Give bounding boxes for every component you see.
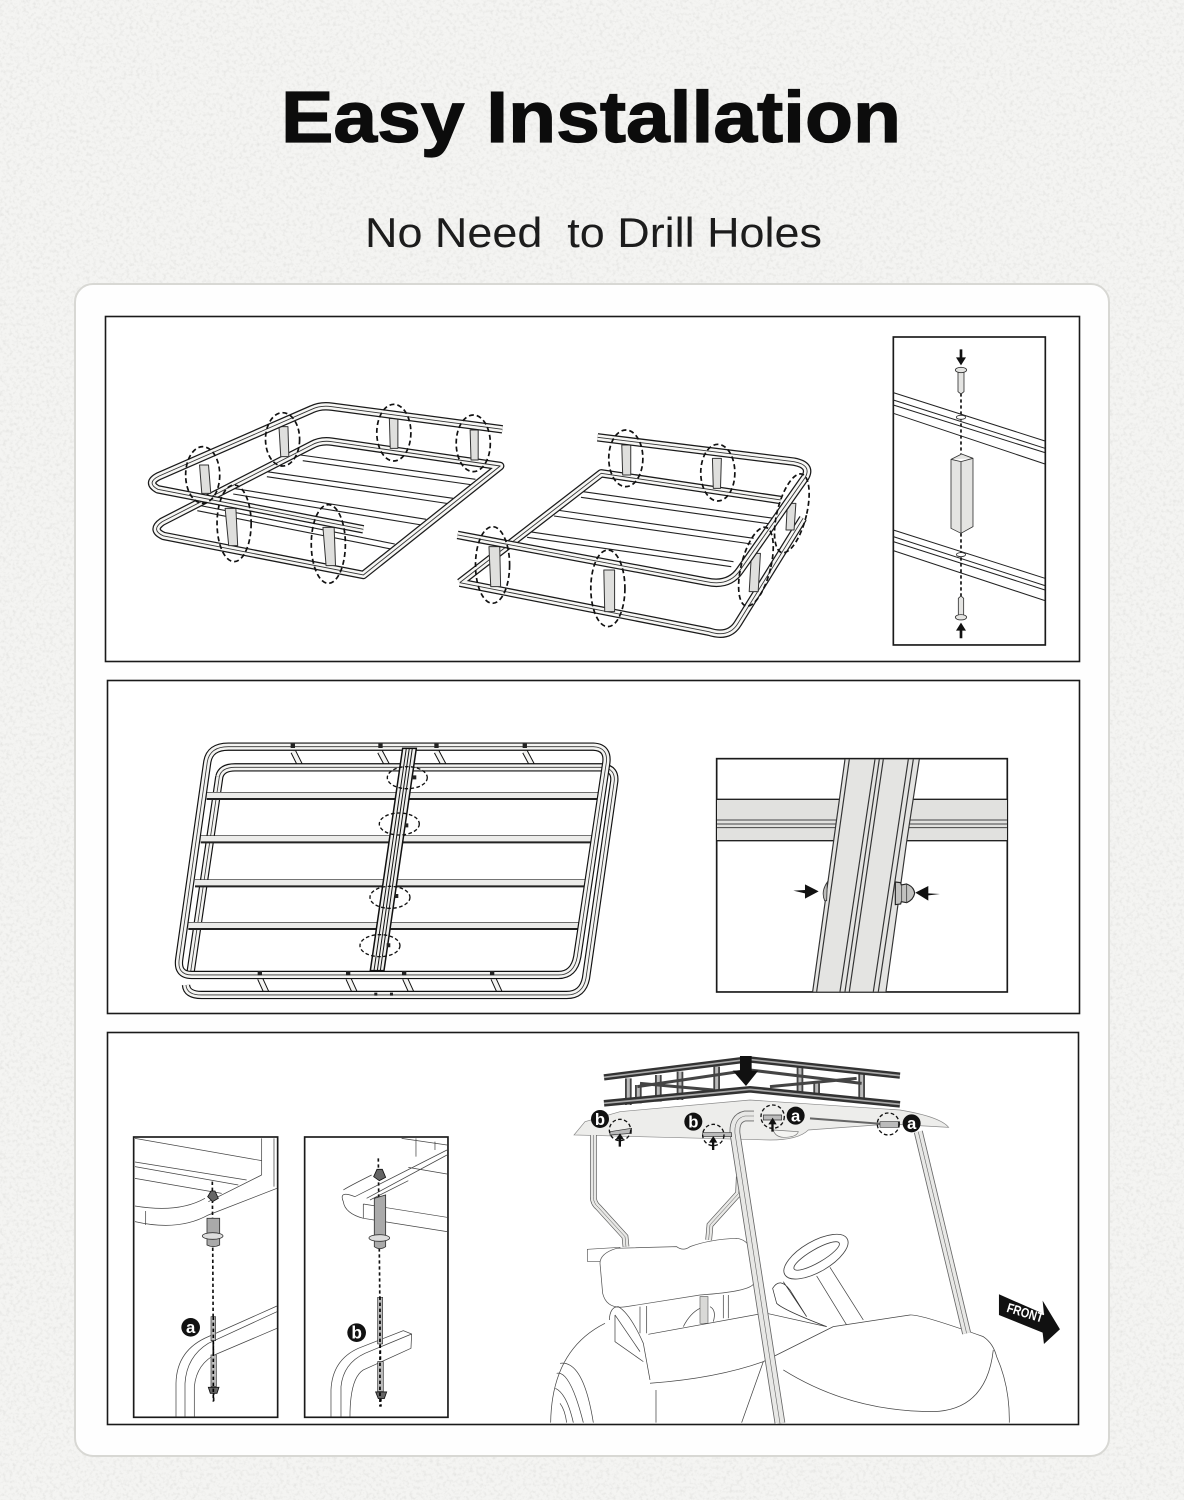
mounting points — [609, 1105, 899, 1150]
panel: step 1 frame assembly — [106, 316, 1080, 662]
card — [75, 284, 1109, 1456]
inset: nut detail — [717, 759, 1007, 992]
label a: a — [186, 1318, 196, 1337]
callout labels: b — [595, 1110, 605, 1129]
rack illustrations, step 1 — [152, 404, 816, 634]
inset b: rear bracket — [305, 1137, 448, 1417]
front pillars — [735, 1116, 967, 1423]
panel: step 3 mounting on golf cart — [108, 1032, 1078, 1424]
callout labels — [591, 1106, 921, 1133]
cart pillars — [593, 1135, 739, 1247]
title: Easy Installation — [281, 78, 901, 158]
subtitle: No Need to Drill Holes — [365, 209, 822, 256]
cart roof — [574, 1100, 949, 1140]
left rack — [152, 404, 502, 583]
callout labels: a — [907, 1114, 917, 1133]
cart body — [551, 1313, 1009, 1423]
right rack — [458, 430, 816, 634]
rack top view — [179, 744, 614, 997]
callout labels: b — [688, 1113, 698, 1132]
inset: post and screws — [893, 337, 1045, 645]
label b: b — [351, 1323, 362, 1343]
seat and steering — [587, 1225, 863, 1380]
rack on roof — [604, 1059, 900, 1105]
callout labels: a — [791, 1106, 801, 1125]
front arrow — [999, 1294, 1060, 1344]
down arrow — [733, 1056, 758, 1086]
inset a: front bracket — [134, 1137, 278, 1417]
golf cart with rack — [551, 1056, 1060, 1423]
front arrow: FRONT — [1005, 1300, 1045, 1325]
panel: step 2 centre bar — [108, 680, 1080, 1014]
